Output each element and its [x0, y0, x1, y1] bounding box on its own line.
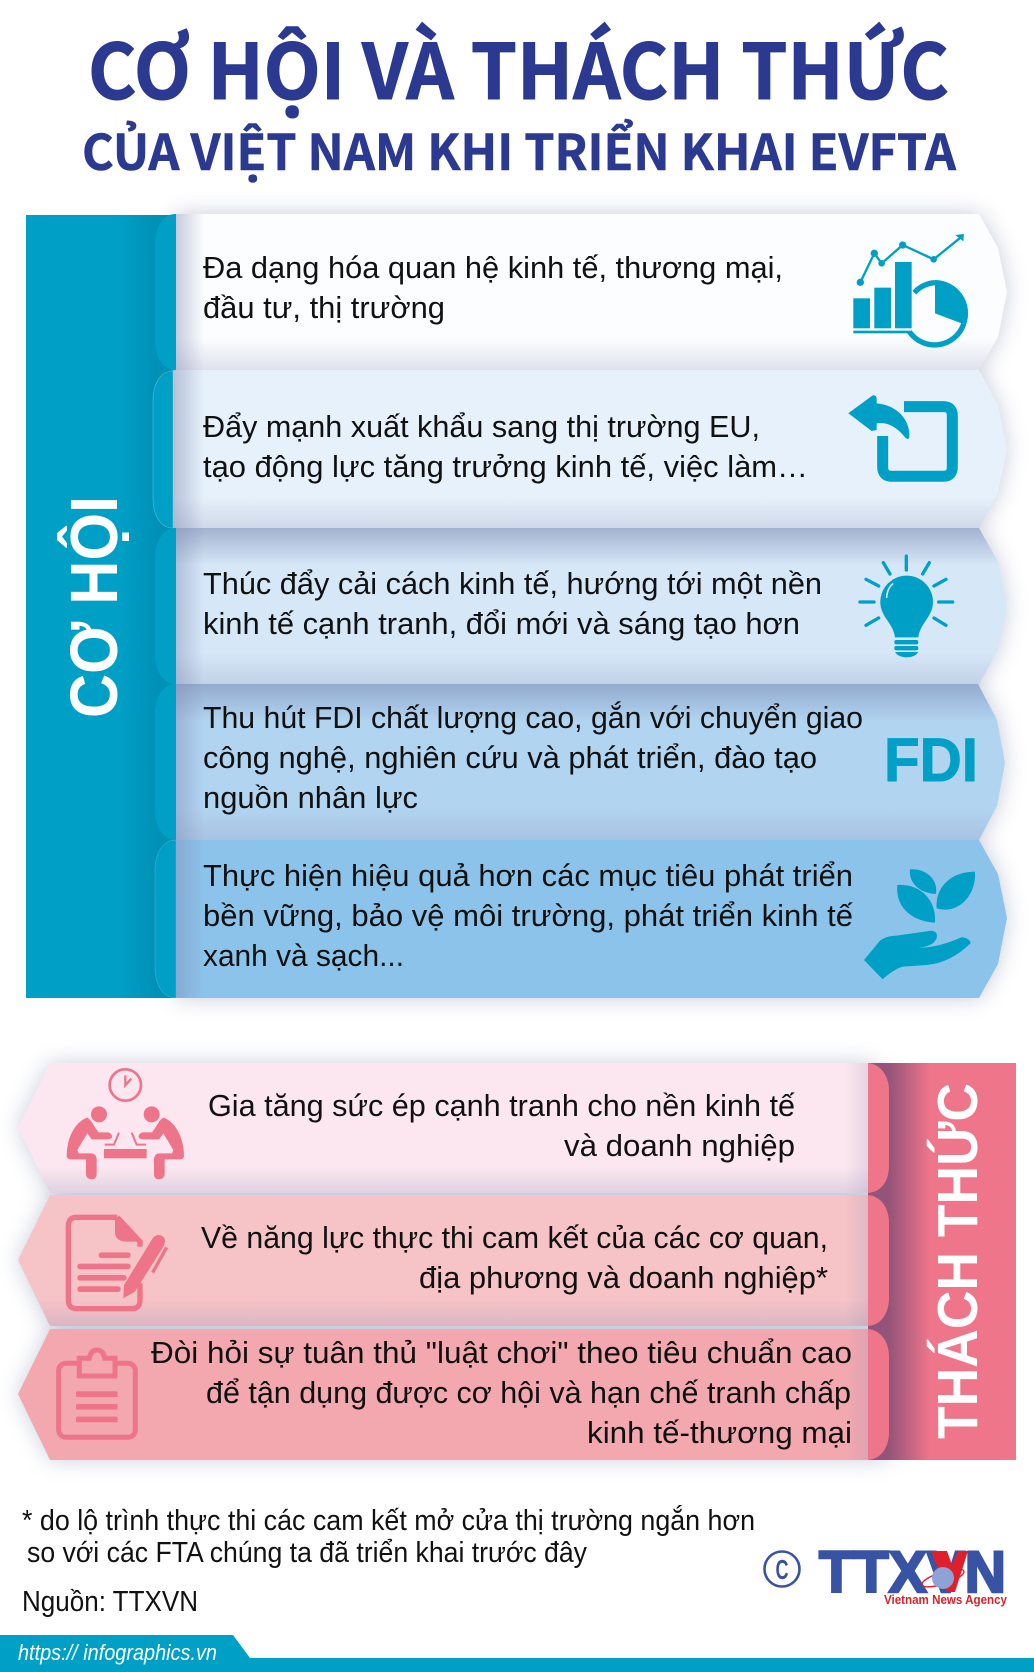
- card 3: Thúc đẩy cải cách kinh tế, hướng tới một nền: [203, 566, 822, 601]
- logo: TTXVN: TTXVN: [819, 1540, 1006, 1605]
- card 8: để tận dụng được cơ hội và hạn chế tranh chấp: [206, 1375, 851, 1410]
- icon: light bulb: [860, 556, 953, 657]
- icon: FDI: FDI: [884, 726, 978, 794]
- sidebar: Thách thức: THÁCH THỨC: [926, 1083, 990, 1439]
- card 6: Gia tăng sức ép cạnh tranh cho nền kinh tế: [208, 1088, 795, 1123]
- logo: TTXVN: Vietnam News Agency: [884, 1593, 1007, 1607]
- card 2: Đẩy mạnh xuất khẩu sang thị trường EU,: [203, 409, 760, 444]
- footnote: * do lộ trình thực thi các cam kết mở cửa thị trường ngắn hơn: [22, 1504, 755, 1537]
- copyright symbol: C: [776, 1554, 788, 1585]
- sidebar: Cơ hội: [26, 215, 176, 998]
- card 4: công nghệ, nghiên cứu và phát triển, đào tạo: [203, 740, 817, 775]
- title: [82, 11, 957, 185]
- source: Nguồn: TTXVN: [22, 1586, 198, 1618]
- footnote: so với các FTA chúng ta đã triển khai trước đây: [27, 1537, 587, 1569]
- footer bar: [0, 1635, 1034, 1672]
- card 1: Đa dạng hóa quan hệ kinh tế, thương mại,: [203, 250, 783, 285]
- card 8: [18, 1329, 889, 1460]
- card 3: kinh tế cạnh tranh, đổi mới và sáng tạo hơn: [203, 606, 800, 641]
- card 8: kinh tế-thương mại: [587, 1415, 852, 1450]
- icon: meeting with clock: [67, 1069, 184, 1179]
- sidebar: Thách thức: [868, 1063, 1016, 1460]
- card 5: xanh và sạch...: [203, 938, 404, 973]
- icon: clipboard: [59, 1350, 135, 1437]
- card 1: [155, 214, 1007, 370]
- card 6: [18, 1063, 889, 1193]
- copyright symbol: [764, 1552, 800, 1586]
- panel: challenges: [18, 1063, 1016, 1460]
- icon: charts: [853, 234, 968, 345]
- card 6: và doanh nghiệp: [564, 1128, 795, 1163]
- card 7: Về năng lực thực thi cam kết của các cơ quan,: [201, 1220, 828, 1255]
- card 2: tạo động lực tăng trưởng kinh tế, việc làm…: [203, 449, 808, 484]
- icon: hand with leaves: [864, 869, 975, 979]
- icon: export arrow: [848, 395, 952, 476]
- card 5: [155, 840, 1007, 998]
- title: CỦA VIỆT NAM KHI TRIỂN KHAI EVFTA: [82, 114, 957, 185]
- card 1: đầu tư, thị trường: [203, 290, 445, 325]
- card 5: bền vững, bảo vệ môi trường, phát triển kinh tế: [203, 898, 853, 933]
- card 5: Thực hiện hiệu quả hơn các mục tiêu phát triển: [203, 858, 853, 893]
- card 2: [153, 370, 1007, 528]
- card 7: địa phương và doanh nghiệp*: [419, 1260, 828, 1295]
- card 7: [18, 1195, 889, 1326]
- card 4: Thu hút FDI chất lượng cao, gắn với chuyển giao: [203, 700, 863, 735]
- icon: document and pen: [68, 1217, 167, 1309]
- footnote: [22, 1504, 755, 1569]
- card 4: nguồn nhân lực: [203, 780, 418, 815]
- sidebar: Cơ hội: CƠ HỘI: [57, 496, 132, 718]
- footer bar: https:// infographics.vn: [18, 1640, 217, 1665]
- card 4: [155, 684, 1005, 840]
- title: CƠ HỘI VÀ THÁCH THỨC: [88, 11, 949, 121]
- card 8: Đòi hỏi sự tuân thủ "luật chơi" theo tiêu chuẩn cao: [151, 1335, 852, 1370]
- panel: opportunities: [26, 214, 1007, 998]
- card 3: [155, 528, 1007, 684]
